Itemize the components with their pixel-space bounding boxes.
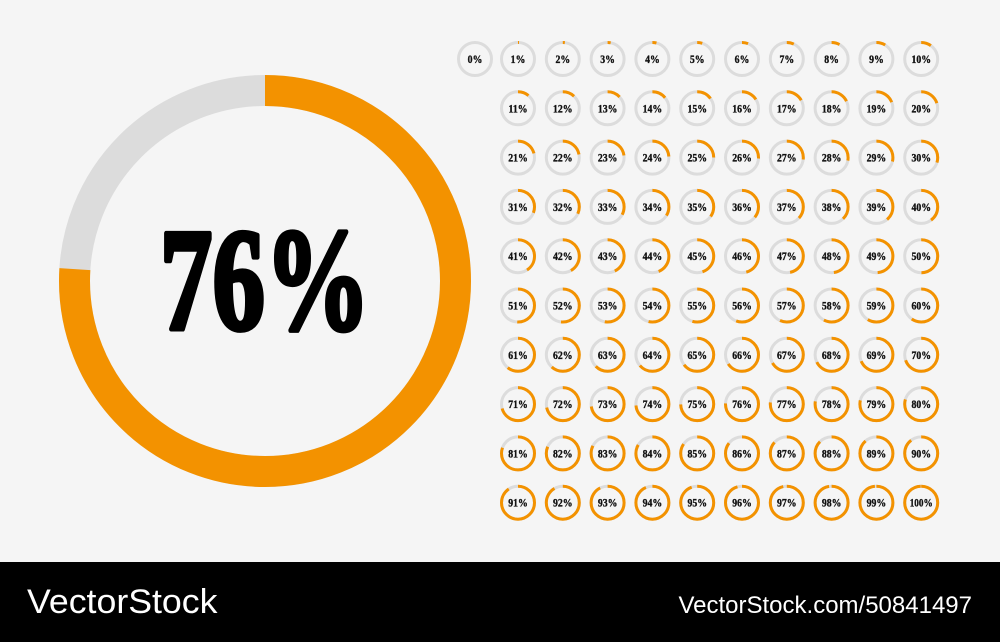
small gauges grid: 72% bbox=[553, 398, 573, 411]
small gauges grid: 10% bbox=[911, 53, 931, 66]
small gauges grid: 64% bbox=[643, 349, 662, 362]
small gauges grid: 41% bbox=[508, 251, 528, 263]
small gauges grid: 27% bbox=[777, 152, 797, 165]
small gauges grid: 87% bbox=[777, 448, 797, 461]
small gauges grid: 38% bbox=[822, 201, 841, 214]
small gauges grid: 42% bbox=[553, 251, 573, 263]
big gauge 76%: 76% bbox=[160, 199, 370, 361]
small gauges grid: 91% bbox=[508, 497, 528, 510]
small gauges grid: 3% bbox=[600, 53, 615, 66]
small gauges grid: 95% bbox=[687, 497, 707, 510]
small gauges grid: 2% bbox=[555, 53, 570, 66]
small gauges grid: 99% bbox=[867, 497, 886, 510]
small gauges grid: 20% bbox=[911, 103, 931, 116]
small gauges grid: 65% bbox=[687, 349, 707, 362]
small gauges grid: 75% bbox=[687, 398, 707, 411]
footer bar bbox=[0, 562, 1000, 642]
small gauges grid: 43% bbox=[598, 251, 617, 263]
small gauges grid: 32% bbox=[553, 201, 573, 214]
small gauges grid: 80% bbox=[911, 398, 931, 411]
small gauges grid: 82% bbox=[553, 448, 573, 461]
small gauges grid: 93% bbox=[598, 497, 617, 510]
small gauges grid: 57% bbox=[777, 300, 797, 313]
small gauges grid: 62% bbox=[553, 349, 573, 362]
small gauges grid: 70% bbox=[911, 349, 931, 362]
small gauges grid: 69% bbox=[867, 349, 886, 362]
small gauges grid: 25% bbox=[687, 152, 707, 165]
small gauges grid: 78% bbox=[822, 398, 841, 411]
small gauges grid: 13% bbox=[598, 103, 617, 116]
small gauges grid: 15% bbox=[687, 103, 707, 116]
small gauges grid: 33% bbox=[598, 201, 617, 214]
small gauges grid: 4% bbox=[645, 53, 660, 66]
small gauges grid: 35% bbox=[687, 201, 707, 214]
small gauges grid: 39% bbox=[867, 201, 886, 214]
small gauges grid: 16% bbox=[732, 103, 752, 116]
small gauges grid: 86% bbox=[732, 448, 752, 461]
small gauges grid: 55% bbox=[687, 300, 707, 313]
small gauges grid: 18% bbox=[822, 103, 841, 116]
big gauge 76% bbox=[74, 90, 456, 472]
small gauges grid: 9% bbox=[869, 53, 884, 66]
small gauges grid: 6% bbox=[735, 53, 749, 66]
small gauges grid: 67% bbox=[777, 349, 797, 362]
small gauges grid: 5% bbox=[690, 53, 705, 66]
small gauges grid: 28% bbox=[822, 152, 841, 165]
small gauges grid: 45% bbox=[687, 251, 707, 263]
small gauges grid: 8% bbox=[824, 53, 839, 66]
small gauges grid: 83% bbox=[598, 448, 617, 461]
small gauges grid: 84% bbox=[643, 448, 662, 461]
small gauges grid: 81% bbox=[508, 448, 528, 461]
small gauges grid: 44% bbox=[643, 251, 662, 263]
small gauges grid: 59% bbox=[867, 300, 886, 313]
small gauges grid: 50% bbox=[911, 251, 931, 263]
small gauges grid: 54% bbox=[643, 300, 662, 313]
small gauges grid: 0% bbox=[468, 53, 482, 66]
small gauges grid: 77% bbox=[777, 398, 797, 411]
small gauges grid: 98% bbox=[822, 497, 841, 510]
small gauges grid: 30% bbox=[911, 152, 931, 165]
small gauges grid: 26% bbox=[732, 152, 752, 165]
small gauges grid: 7% bbox=[779, 53, 794, 66]
small gauges grid: 19% bbox=[867, 103, 886, 116]
small gauges grid: 56% bbox=[732, 300, 752, 313]
small gauges grid: 88% bbox=[822, 448, 841, 461]
small gauges grid: 40% bbox=[911, 201, 931, 214]
small gauges grid: 74% bbox=[643, 398, 662, 411]
small gauges grid: 34% bbox=[643, 201, 662, 214]
small gauges grid: 100% bbox=[910, 498, 933, 510]
small gauges grid: 61% bbox=[508, 349, 528, 362]
small gauges grid: 17% bbox=[777, 103, 797, 116]
small gauges grid: 22% bbox=[553, 152, 573, 165]
small gauges grid: 97% bbox=[777, 497, 797, 510]
small gauges grid: 58% bbox=[822, 300, 841, 313]
small gauges grid: 49% bbox=[867, 251, 886, 263]
small gauges grid: 89% bbox=[867, 448, 886, 461]
small gauges grid: 12% bbox=[553, 103, 573, 116]
small gauges grid: 60% bbox=[911, 300, 931, 313]
small gauges grid: 53% bbox=[598, 300, 617, 313]
small gauges grid bbox=[458, 42, 938, 519]
small gauges grid: 51% bbox=[508, 300, 528, 313]
small gauges grid: 68% bbox=[822, 349, 841, 362]
small gauges grid: 46% bbox=[732, 251, 752, 263]
small gauges grid: 92% bbox=[553, 497, 573, 510]
small gauges grid: 71% bbox=[508, 398, 528, 411]
small gauges grid: 14% bbox=[643, 103, 662, 116]
small gauges grid: 29% bbox=[867, 152, 886, 165]
small gauges grid: 1% bbox=[511, 53, 525, 66]
small gauges grid: 37% bbox=[777, 201, 797, 214]
small gauges grid: 36% bbox=[732, 201, 752, 214]
small gauges grid: 96% bbox=[732, 497, 752, 510]
small gauges grid: 85% bbox=[687, 448, 707, 461]
small gauges grid: 21% bbox=[508, 152, 528, 165]
small gauges grid: 66% bbox=[732, 349, 752, 362]
small gauges grid: 76% bbox=[732, 398, 752, 411]
small gauges grid: 52% bbox=[553, 300, 573, 313]
small gauges grid: 31% bbox=[508, 201, 528, 214]
footer bar: VectorStock bbox=[27, 583, 218, 621]
small gauges grid: 79% bbox=[867, 398, 886, 411]
small gauges grid: 24% bbox=[643, 152, 662, 165]
small gauges grid: 63% bbox=[598, 349, 617, 362]
small gauges grid: 23% bbox=[598, 152, 617, 165]
footer bar: VectorStock.com/50841497 bbox=[678, 592, 972, 619]
small gauges grid: 47% bbox=[777, 251, 797, 263]
small gauges grid: 48% bbox=[822, 251, 841, 263]
small gauges grid: 94% bbox=[643, 497, 662, 510]
small gauges grid: 11% bbox=[509, 103, 527, 116]
small gauges grid: 90% bbox=[911, 448, 931, 461]
small gauges grid: 73% bbox=[598, 398, 617, 411]
